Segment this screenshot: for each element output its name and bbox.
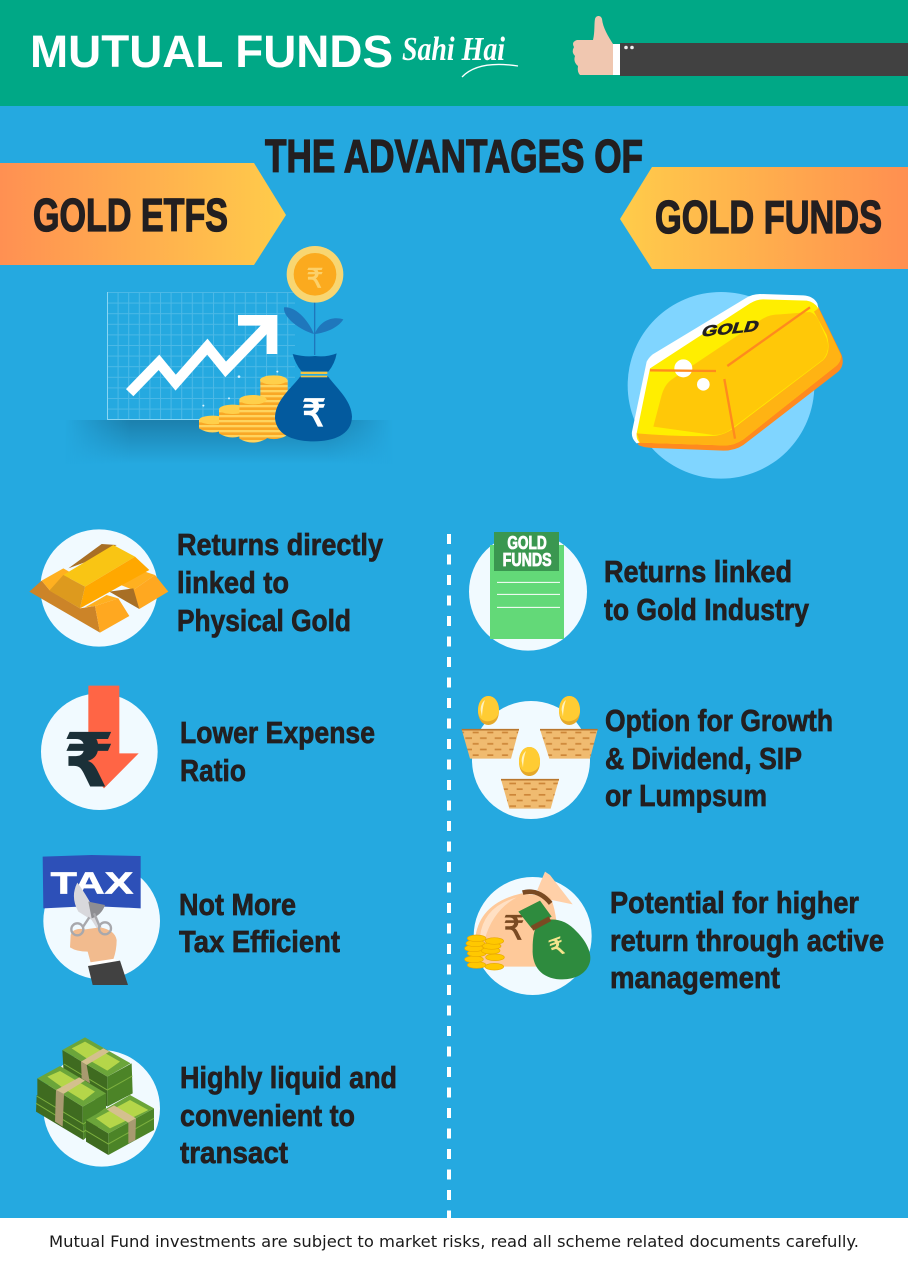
right item 2: options xyxy=(462,696,833,819)
icon: eggs in baskets xyxy=(462,696,598,819)
left item 2: expense ratio xyxy=(41,686,375,810)
coin flower xyxy=(287,246,343,303)
icon: scissors cutting tax: TAX xyxy=(51,866,134,900)
illustration: growth chart, coins and money bag xyxy=(65,246,393,464)
text: returns xyxy=(177,527,384,638)
icon: thumbs up xyxy=(573,16,908,76)
text: liquidity: Highly liquid and xyxy=(180,1060,397,1095)
left item 4: liquidity xyxy=(36,1037,397,1170)
hand xyxy=(70,927,117,963)
icon: rupee with down arrow: ₹ xyxy=(63,717,115,805)
banner: Gold ETFs: GOLD ETFS xyxy=(33,189,228,241)
footer disclaimer xyxy=(0,1218,908,1264)
right item 3: active management xyxy=(465,872,884,995)
right item 1: gold industry xyxy=(469,532,810,651)
text: active management xyxy=(610,885,884,995)
text: options xyxy=(605,703,833,813)
left item 3: tax xyxy=(43,855,340,985)
text: active management: Potential for higher xyxy=(610,885,859,920)
text: options: or Lumpsum xyxy=(605,778,767,813)
sparkles xyxy=(202,371,278,407)
icon: gold funds document xyxy=(469,532,587,651)
icon: money bags and coins xyxy=(465,872,592,995)
scissor handles xyxy=(71,913,111,935)
money bag: ₹ xyxy=(302,391,326,435)
cash stack: right xyxy=(86,1095,154,1155)
logo swoosh xyxy=(462,64,518,77)
text: tax: Tax Efficient xyxy=(179,924,340,959)
gold bar label: GOLD xyxy=(699,318,761,341)
logo: Mutual Funds: MUTUAL FUNDS xyxy=(30,26,393,77)
icon: gold bars xyxy=(29,529,168,647)
coin stacks xyxy=(199,375,288,443)
plant stem and leaves xyxy=(284,300,343,355)
icon: money bags and coins: ₹ xyxy=(503,908,525,947)
coin flower: ₹ xyxy=(307,264,323,295)
illustration: gold bar xyxy=(628,292,843,479)
suit cuff xyxy=(88,959,128,985)
text: liquidity xyxy=(180,1060,397,1170)
text: liquidity: transact xyxy=(180,1135,288,1170)
icon: scissors cutting tax xyxy=(43,855,160,985)
money bag xyxy=(275,353,352,441)
text: tax xyxy=(179,887,340,959)
header band xyxy=(0,0,908,106)
banner: Gold ETFs xyxy=(0,163,286,265)
text: returns: linked to xyxy=(177,565,289,600)
text: options: & Dividend, SIP xyxy=(605,741,802,776)
gold coins xyxy=(465,935,504,970)
cash stack: left xyxy=(36,1066,106,1140)
divider xyxy=(447,534,451,1218)
text: gold industry: to Gold Industry xyxy=(604,592,810,627)
text: expense ratio: Ratio xyxy=(180,753,246,788)
left item 1: returns xyxy=(29,527,384,647)
arrow: rising trend xyxy=(130,315,277,393)
title: THE ADVANTAGES OF xyxy=(265,130,643,182)
text: gold industry: Returns linked xyxy=(604,554,792,589)
scissors xyxy=(74,883,105,933)
text: tax: Not More xyxy=(179,887,296,922)
text: expense ratio: Lower Expense xyxy=(180,715,375,750)
logo: Sahi Hai: Sahi Hai xyxy=(402,31,505,68)
text: active management: management xyxy=(610,960,780,995)
icon: gold funds document: FUNDS xyxy=(503,549,552,570)
green bag: ₹ xyxy=(546,931,569,963)
text: returns: Physical Gold xyxy=(177,603,351,638)
text: liquidity: convenient to xyxy=(180,1098,355,1133)
icon: cash bundles xyxy=(36,1037,160,1167)
footer disclaimer: Mutual Fund investments are subject to market risks, read all scheme related documents carefully. xyxy=(49,1232,859,1251)
banner: Gold Funds xyxy=(620,167,908,269)
icon: rupee with down arrow xyxy=(41,686,158,810)
cash stack: top xyxy=(62,1037,133,1107)
text: options: Option for Growth xyxy=(605,703,833,738)
text: returns: Returns directly xyxy=(177,527,384,562)
text: gold industry xyxy=(604,554,810,627)
icon: gold funds document: GOLD xyxy=(507,532,547,553)
text: expense ratio xyxy=(180,715,375,788)
